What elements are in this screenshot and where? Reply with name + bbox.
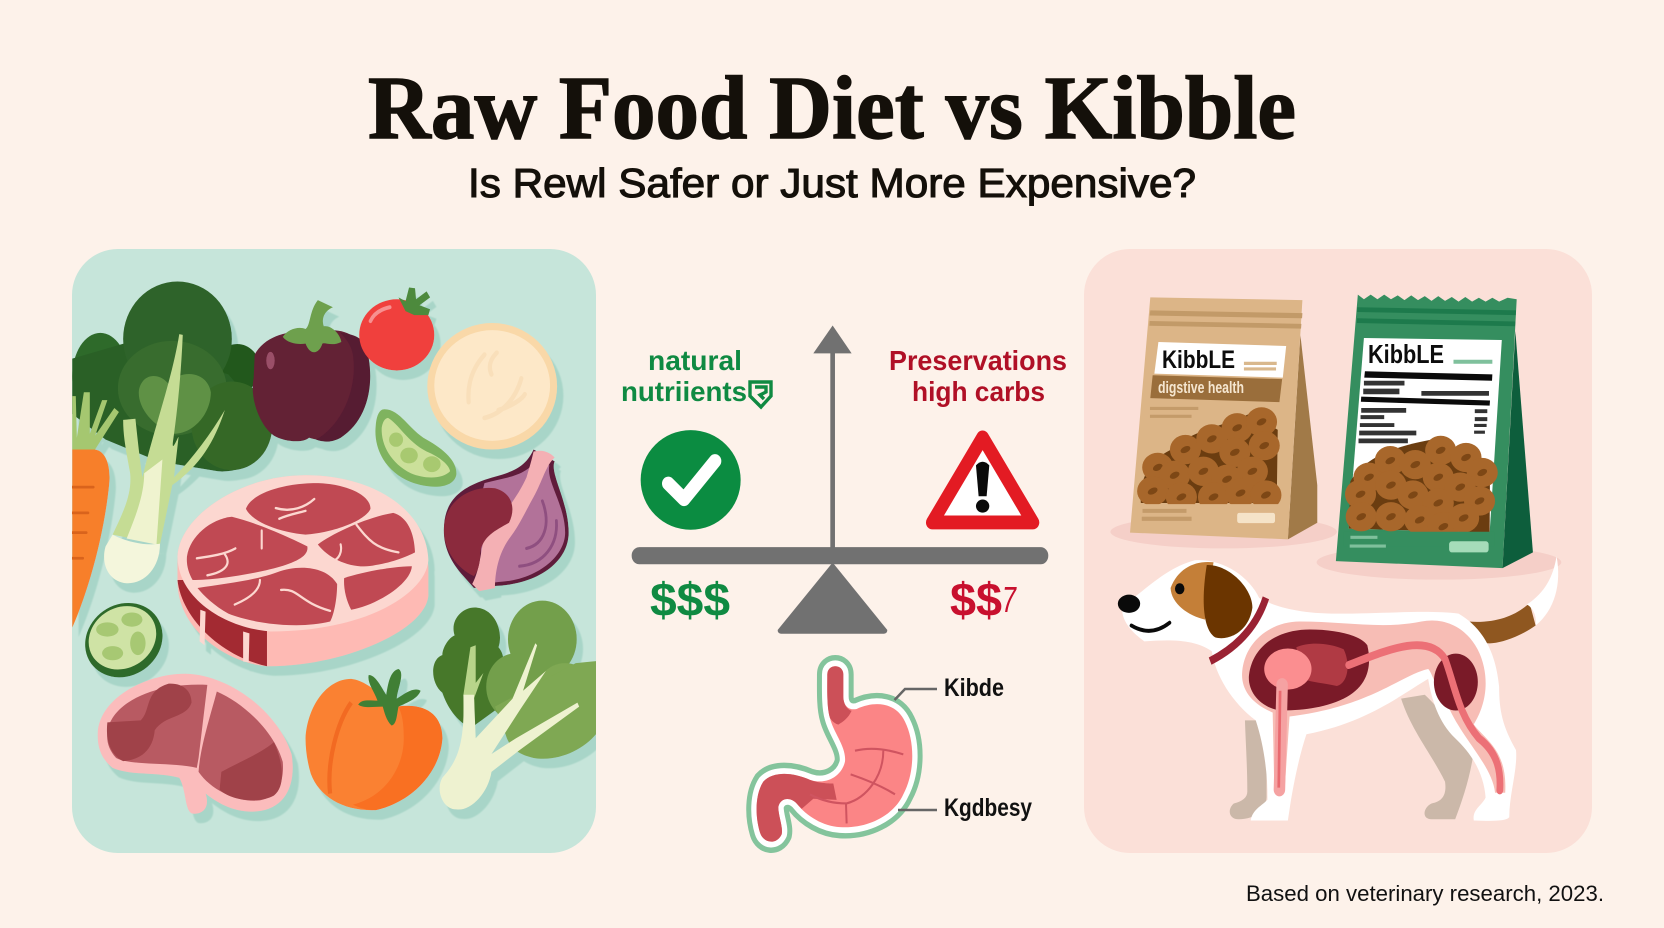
panel: kibble (1084, 249, 1592, 853)
icon: stomach diagram (757, 666, 912, 842)
icon: green kibble bag: KibbLE (1368, 339, 1444, 369)
cost: kibble: 7 (1002, 579, 1017, 620)
icon: broccoli (72, 282, 272, 471)
body (1122, 560, 1516, 821)
icon: small shield (750, 382, 771, 407)
icon: leek stalk (104, 334, 225, 583)
icon: red onion (444, 450, 569, 591)
leader and label: Kibde (894, 674, 1004, 702)
icon: dog with digestive tract (1118, 556, 1558, 821)
icon: cucumber round (85, 603, 169, 687)
panel: scale comparison (621, 325, 1067, 842)
leader and label: Kibde: Kibde (944, 674, 1004, 702)
cost: raw: $$$ (650, 573, 730, 626)
icon: kraft kibble bag (1110, 297, 1337, 548)
footnote: Based on veterinary research, 2023. (1246, 881, 1604, 906)
label: natural nutrients: nutriients (621, 376, 747, 407)
icon: leafy greens (433, 601, 597, 810)
tail (1469, 603, 1536, 643)
balance scale (632, 325, 1048, 634)
icon: kraft kibble bag: KibbLE (1162, 346, 1235, 374)
label: natural nutrients (621, 345, 771, 407)
leader and label: Kgdbesy (898, 794, 1032, 822)
subtitle: Is Rewl Safer or Just More Expensive? (468, 160, 1196, 206)
panel: raw food (72, 249, 597, 853)
icon: green check (641, 430, 741, 530)
icon: warning triangle (932, 437, 1033, 522)
icon: tomato (359, 287, 434, 370)
title: Raw Food Diet vs Kibble (368, 59, 1296, 158)
label: preservatives: Preservations (889, 345, 1067, 376)
icon: liver (98, 674, 293, 814)
leader and label: Kgdbesy: Kgdbesy (944, 794, 1032, 822)
cost: kibble: $$ (950, 573, 1002, 626)
head patch and ear (1171, 562, 1214, 620)
icon: orange squash (306, 669, 442, 810)
label: preservatives: high carbs (912, 376, 1045, 407)
icon: sliced root (427, 323, 557, 450)
icon: carrot (72, 392, 119, 627)
icon: steak (178, 475, 428, 666)
icon: kraft kibble bag: digstive health (1158, 378, 1244, 397)
digestive outline (1242, 621, 1505, 793)
icon: purple plum (253, 300, 370, 442)
label: preservatives (889, 345, 1067, 407)
icon: green kibble bag (1317, 295, 1561, 580)
far legs (1230, 695, 1473, 819)
label: natural nutrients: natural (648, 345, 742, 376)
icon: cucumber wedge (375, 409, 456, 487)
